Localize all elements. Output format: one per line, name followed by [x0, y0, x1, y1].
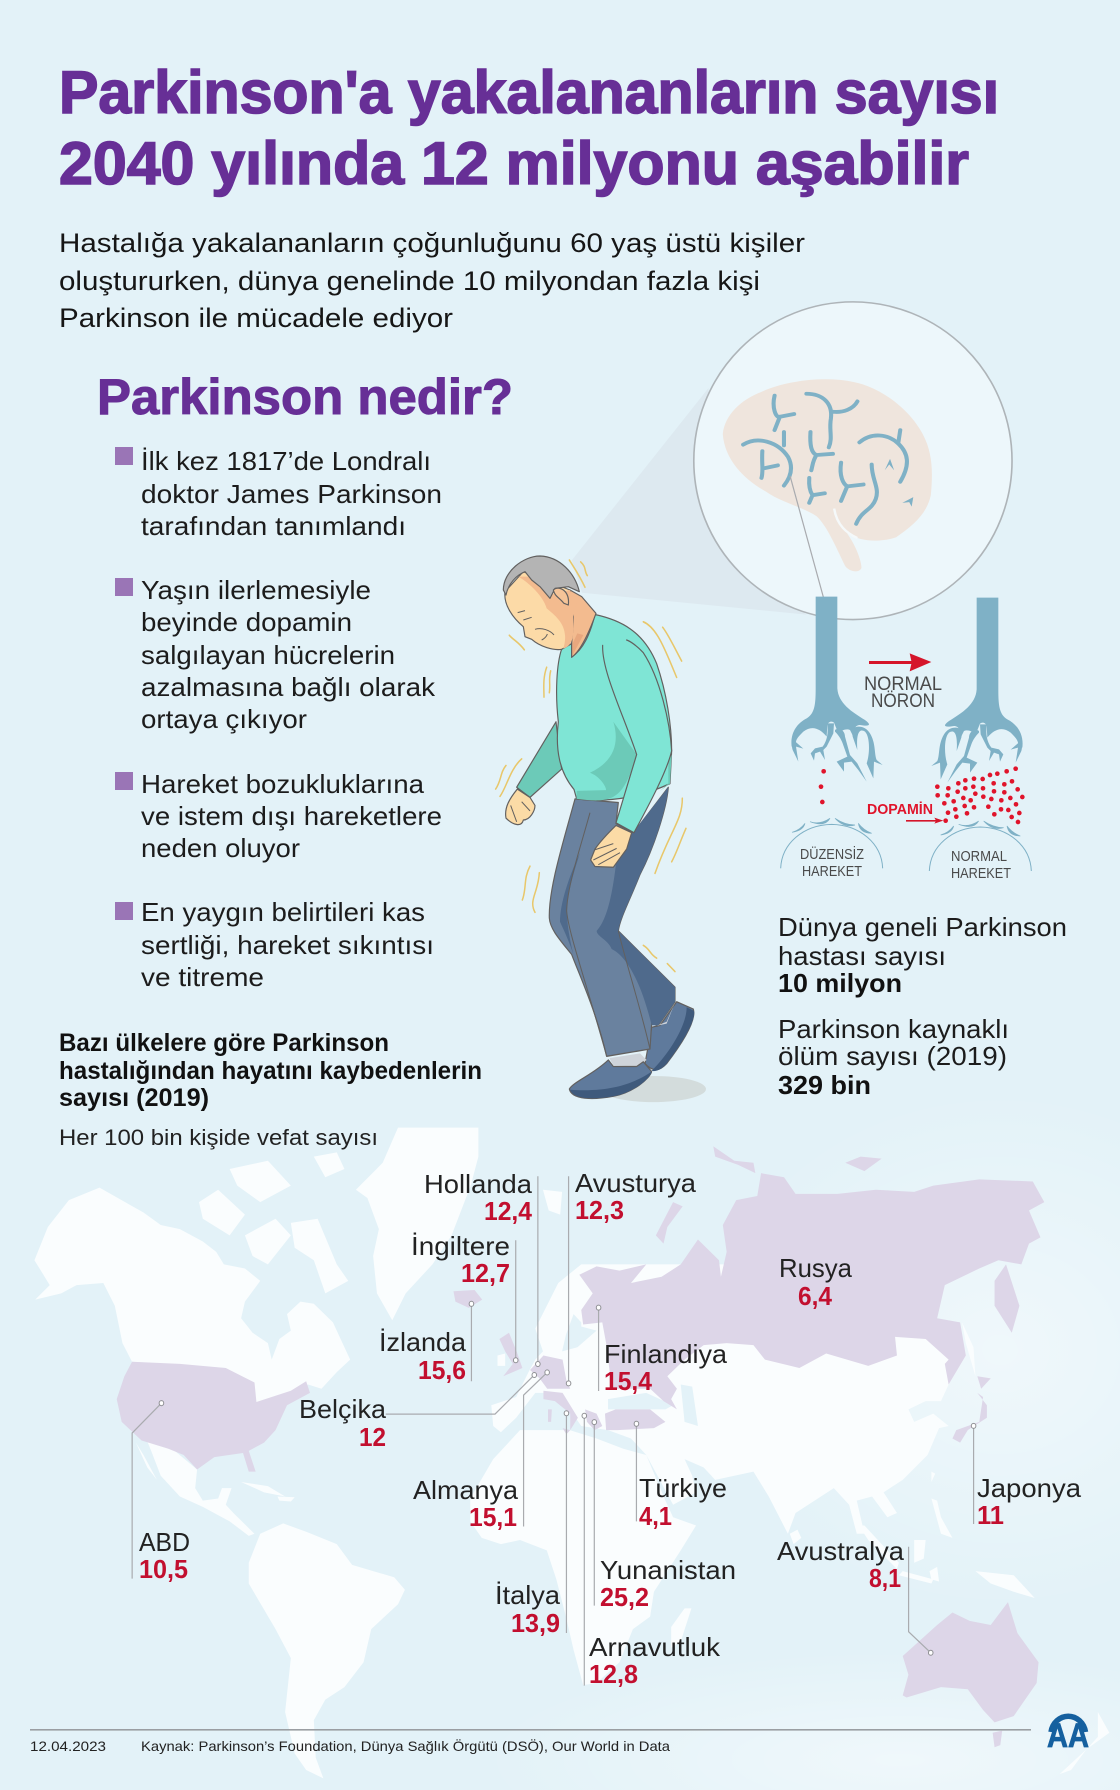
label: Arnavutluk: 12,8 [589, 1659, 638, 1689]
zoom cone [572, 388, 806, 615]
label: Arnavutluk: Arnavutluk [589, 1632, 721, 1662]
neuron label: normal nöron: NORMAL [864, 674, 942, 695]
label: Türkiye: 4,1 [639, 1501, 672, 1531]
illustration: magnified brain [572, 302, 1012, 620]
label: Belçika: 12 [359, 1422, 386, 1452]
label: Japonya: 11 [977, 1500, 1004, 1530]
label: İngiltere: İngiltere [411, 1231, 510, 1261]
label: Japonya [977, 1473, 1082, 1530]
bullet 2: Yaşın ilerlemesiyle [141, 575, 371, 605]
ear [553, 588, 568, 605]
bullet 3: ve istem dışı hareketlere [141, 801, 442, 831]
receptor: left [781, 818, 883, 868]
bullet 2: beyinde dopamin [141, 607, 352, 637]
map heading: sayısı (2019) [59, 1084, 209, 1112]
world map [34, 1128, 1109, 1778]
stat: deaths [778, 1014, 1009, 1100]
map: americas and greenland [34, 1128, 505, 1778]
stat: deaths: Parkinson kaynaklı [778, 1014, 1009, 1044]
label: Almanya [413, 1475, 519, 1532]
label: Hollanda [424, 1169, 533, 1226]
face [505, 572, 573, 650]
icon: brain [723, 379, 932, 571]
magnifier circle [694, 302, 1012, 620]
label: normal hareket [951, 848, 1011, 882]
bullet 4 [115, 897, 434, 992]
neuron label: normal nöron: NÖRON [871, 691, 935, 712]
title: 2040 yılında 12 milyonu aşabilir [59, 130, 969, 197]
dopamine dots: dense [935, 766, 1025, 824]
bullet 2: salgılayan hücrelerin [141, 640, 395, 670]
label: İngiltere: 12,7 [461, 1258, 510, 1288]
label: Avustralya: 8,1 [869, 1563, 901, 1593]
tremor lines [496, 560, 686, 972]
heading: Parkinson nedir: Parkinson nedir? [97, 369, 513, 425]
label: İtalya [495, 1580, 561, 1638]
shadow [601, 1076, 706, 1102]
bullet 3: neden oluyor [141, 833, 300, 863]
intro text: Parkinson ile mücadele ediyor [59, 303, 453, 333]
label: ABD: 10,5 [139, 1554, 188, 1584]
footer source: Kaynak: Parkinson’s Foundation, Dünya Sağlık Örgütü (DSÖ), Our World in Data [141, 1737, 670, 1754]
stat: world patients: hastası sayısı [778, 941, 946, 971]
socks [609, 1002, 675, 1066]
map subheading: Her 100 bin kişide vefat sayısı [59, 1125, 378, 1150]
label: Yunanistan [600, 1555, 736, 1612]
leader lines [132, 1176, 976, 1686]
bullet 2: ortaya çıkıyor [141, 704, 307, 734]
label: ABD: ABD [139, 1527, 190, 1557]
label: düzensiz hareket: HAREKET [802, 863, 862, 880]
label: İzlanda: İzlanda [379, 1327, 467, 1357]
label: Arnavutluk [589, 1632, 721, 1689]
label: Almanya: 15,1 [469, 1502, 517, 1532]
pants [549, 787, 675, 1056]
label: Rusya: Rusya [779, 1253, 853, 1283]
arrow: dopamine [906, 818, 943, 824]
stat: world patients: Dünya geneli Parkinson [778, 912, 1067, 942]
label: ABD [139, 1527, 190, 1584]
stat: world patients [778, 912, 1067, 998]
label: Türkiye [639, 1473, 727, 1531]
label: Rusya: 6,4 [798, 1281, 832, 1311]
logo: AA: AA [1047, 1717, 1089, 1755]
bullet 1: doktor James Parkinson [141, 479, 442, 509]
label: düzensiz hareket: DÜZENSİZ [800, 845, 864, 863]
back shoe [645, 1002, 694, 1070]
label: Yunanistan: 25,2 [600, 1582, 649, 1612]
front sleeve [603, 640, 672, 833]
label: Rusya [779, 1253, 853, 1311]
man: head [503, 556, 596, 657]
label: Finlandiya: Finlandiya [604, 1339, 728, 1369]
footer rule [30, 1729, 1031, 1731]
label: düzensiz hareket [800, 845, 864, 880]
face shade [518, 577, 577, 649]
bullet 1: tarafından tanımlandı [141, 511, 406, 541]
title [59, 59, 999, 197]
hand back [506, 789, 535, 825]
intro text: oluştururken, dünya genelinde 10 milyondan fazla kişi [59, 266, 760, 296]
map heading: Bazı ülkelere göre Parkinson [59, 1029, 389, 1057]
title: Parkinson'a yakalananların sayısı [59, 59, 999, 126]
label: İtalya: 13,9 [511, 1608, 560, 1638]
back arm [517, 722, 562, 797]
front hand [591, 825, 632, 867]
man: body [496, 560, 706, 1102]
neck [570, 590, 596, 657]
neuron label: normal nöron [864, 674, 942, 712]
label: Avustralya: Avustralya [777, 1536, 905, 1566]
inland seas [562, 1314, 715, 1480]
stat: world patients: 10 milyon [778, 968, 902, 998]
bullet 1: İlk kez 1817’de Londralı [141, 446, 431, 476]
illustration: elderly man [496, 556, 706, 1102]
map: eurasia, africa and islands [470, 1190, 1109, 1774]
bullet 4: sertliği, hareket sıkıntısı [141, 930, 434, 960]
sweater shadow [577, 722, 637, 800]
label: dopamin: DOPAMİN [867, 801, 933, 818]
footer date: 12.04.2023 [30, 1738, 106, 1754]
map: highlighted Russia and Eurasian countries [579, 1146, 1044, 1747]
bullet 2 [115, 575, 436, 734]
label: Hollanda: 12,4 [484, 1196, 533, 1226]
neuron: right [931, 598, 1023, 783]
facial lines [518, 611, 554, 640]
label: Belçika [299, 1394, 387, 1452]
bullet list [115, 446, 442, 992]
bullet 2: azalmasına bağlı olarak [141, 672, 436, 702]
label: Avusturya [575, 1168, 697, 1225]
label: Belçika: Belçika [299, 1394, 387, 1424]
intro text: Hastalığa yakalananların çoğunluğunu 60 yaş üstü kişiler [59, 228, 805, 258]
label: İzlanda [379, 1327, 467, 1385]
label: Hollanda: Hollanda [424, 1169, 533, 1199]
label: Almanya: Almanya [413, 1475, 519, 1505]
intro text [59, 228, 805, 333]
label: İtalya: İtalya [495, 1580, 561, 1610]
label: Avusturya: 12,3 [575, 1195, 624, 1225]
bullet 1 [115, 446, 442, 541]
neuron: left [791, 597, 883, 782]
map: highlighted Iceland, UK and central Europe [453, 1290, 578, 1434]
bullet 3: Hareket bozukluklarına [141, 769, 425, 799]
illustration: neurons and dopamine [781, 597, 1031, 871]
hair [503, 556, 579, 598]
label: Finlandiya: 15,4 [604, 1366, 653, 1396]
label: Yunanistan: Yunanistan [600, 1555, 736, 1585]
label: normal hareket: HAREKET [951, 865, 1011, 882]
pointer line [790, 476, 824, 598]
label: Türkiye: Türkiye [639, 1473, 727, 1503]
dopamine dots: sparse [819, 769, 826, 804]
map heading: hastalığından hayatını kaybedenlerin [59, 1057, 482, 1085]
arrow: normal neuron [869, 653, 931, 671]
label: Avusturya: Avusturya [575, 1168, 697, 1198]
label: normal hareket: NORMAL [951, 848, 1007, 865]
label: Japonya: Japonya [977, 1473, 1082, 1503]
label: Finlandiya [604, 1339, 728, 1396]
sweater [557, 615, 672, 800]
label: Avustralya [777, 1536, 905, 1593]
map heading [59, 1029, 482, 1112]
label: İngiltere [411, 1231, 510, 1288]
stat: deaths: 329 bin [778, 1070, 871, 1100]
bullet 4: En yaygın belirtileri kas [141, 897, 425, 927]
pants shadow [597, 787, 675, 1025]
bullet 3 [115, 769, 442, 863]
receptor: right [929, 821, 1031, 871]
bullet 4: ve titreme [141, 962, 264, 992]
label: İzlanda: 15,6 [418, 1355, 466, 1385]
map: highlighted USA [117, 1362, 310, 1472]
front shoe [569, 1060, 652, 1098]
stat: deaths: ölüm sayısı (2019) [778, 1041, 1007, 1071]
